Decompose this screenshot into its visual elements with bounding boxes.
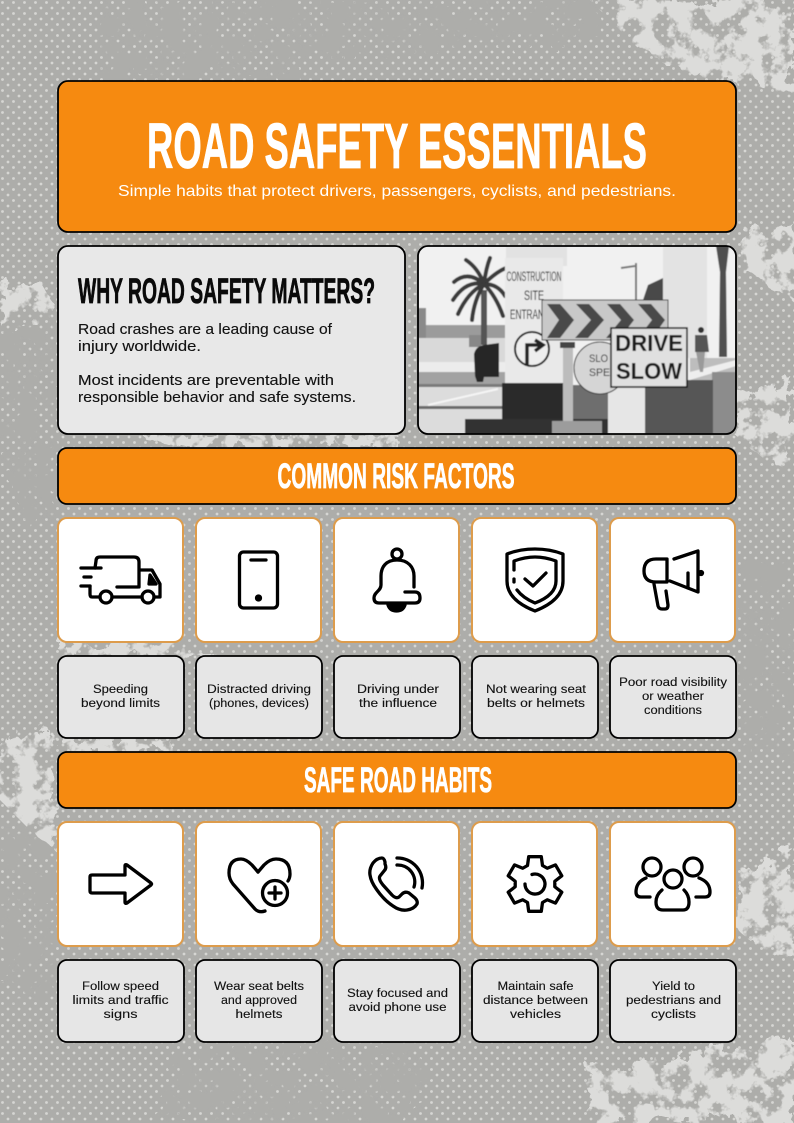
section heading: common risk factors: COMMON RISK FACTORS — [278, 457, 514, 496]
label: seat belts and helmets — [196, 960, 322, 1042]
photo: road construction signs: SLO — [589, 353, 608, 365]
label: speeding — [58, 656, 184, 738]
section heading: safe road habits — [58, 752, 736, 808]
icon card: people — [610, 822, 735, 946]
photo: road construction signs: SLOW — [616, 358, 682, 384]
photo: road construction signs — [418, 246, 736, 434]
label: follow speed limits — [58, 960, 184, 1042]
slow speed sign — [574, 342, 626, 394]
title panel — [58, 81, 736, 232]
construction board — [506, 246, 567, 266]
icon card: gear — [472, 822, 597, 946]
labels: safe habits — [58, 960, 736, 1042]
text block: crashes: injury worldwide. — [78, 339, 201, 355]
label: distracted driving: (phones, devices) — [209, 696, 309, 710]
label: seat belts or helmets: Not wearing seat — [486, 682, 587, 696]
photo: road construction signs: ENTRAN — [510, 307, 544, 322]
base and dark blocks — [572, 384, 608, 420]
car — [474, 343, 499, 382]
label: poor visibility: or weather — [642, 689, 704, 703]
label: follow speed limits: limits and traffic — [72, 993, 168, 1007]
icon card: phone call — [334, 822, 459, 946]
text block: crashes: Road crashes are a leading cause of — [78, 322, 333, 338]
icon card: bell — [334, 518, 459, 642]
section heading: common risk factors — [58, 448, 736, 504]
pillar, lamp, trees — [663, 246, 707, 358]
label: stay focused: Stay focused and — [347, 986, 448, 1000]
label: seat belts or helmets: belts or helmets — [487, 696, 585, 710]
section heading: safe road habits: SAFE ROAD HABITS — [304, 761, 492, 800]
icon card: phone — [196, 518, 321, 642]
drive slow sign — [611, 328, 687, 387]
label: driving under the influence — [334, 656, 460, 738]
heading: why road safety matters: WHY ROAD SAFETY MATTERS? — [78, 272, 375, 311]
label: yield to pedestrians: cyclists — [651, 1007, 696, 1021]
label: poor visibility — [610, 656, 736, 738]
label: safe distance: vehicles — [510, 1007, 561, 1021]
text block: preventable: Most incidents are preventable with — [78, 373, 334, 389]
label: follow speed limits: signs — [104, 1007, 138, 1021]
label: speeding: Speeding — [93, 682, 148, 696]
label: safe distance: Maintain safe — [498, 979, 574, 993]
label: seat belts and helmets: and approved — [221, 993, 297, 1007]
text block: preventable — [78, 373, 356, 406]
label: distracted driving: Distracted driving — [207, 682, 311, 696]
photo: road construction signs: CONSTRUCTION — [506, 269, 562, 284]
label: distracted driving — [196, 656, 322, 738]
labels: risk factors — [58, 656, 736, 738]
label: safe distance — [472, 960, 598, 1042]
label: yield to pedestrians: Yield to — [652, 979, 695, 993]
label: poor visibility: Poor road visibility — [619, 675, 728, 689]
icon card: megaphone — [610, 518, 735, 642]
photo: road construction signs: SPE — [589, 367, 610, 379]
subtitle: Simple habits that protect drivers, passengers, cyclists, and pedestrians. — [118, 183, 676, 200]
label: seat belts and helmets: Wear seat belts — [214, 979, 304, 993]
text block: crashes — [78, 322, 333, 355]
panel: why road safety matters — [58, 246, 405, 434]
chevron sign — [542, 300, 668, 340]
text block: preventable: responsible behavior and safe systems. — [78, 390, 356, 406]
person — [698, 327, 704, 333]
label: yield to pedestrians: pedestrians and — [626, 993, 721, 1007]
label: seat belts or helmets — [472, 656, 598, 738]
photo: road construction signs: SITE — [524, 288, 544, 303]
label: speeding: beyond limits — [81, 696, 160, 710]
label: stay focused: avoid phone use — [348, 1000, 447, 1014]
label: driving under the influence: the influence — [359, 696, 437, 710]
icon card: heart with plus — [196, 822, 321, 946]
label: driving under the influence: Driving under — [357, 682, 439, 696]
photo: road construction signs: DRIVE — [615, 330, 683, 356]
icon card: shield — [472, 518, 597, 642]
palm — [481, 290, 487, 345]
label: follow speed limits: Follow speed — [82, 979, 159, 993]
label: yield to pedestrians — [610, 960, 736, 1042]
label: seat belts and helmets: helmets — [236, 1007, 282, 1021]
icon card: speeding truck — [58, 518, 183, 642]
right ground — [690, 358, 736, 381]
label: stay focused — [334, 960, 460, 1042]
label: poor visibility: conditions — [644, 703, 702, 717]
label: safe distance: distance between — [483, 993, 588, 1007]
icon card: arrow — [58, 822, 183, 946]
